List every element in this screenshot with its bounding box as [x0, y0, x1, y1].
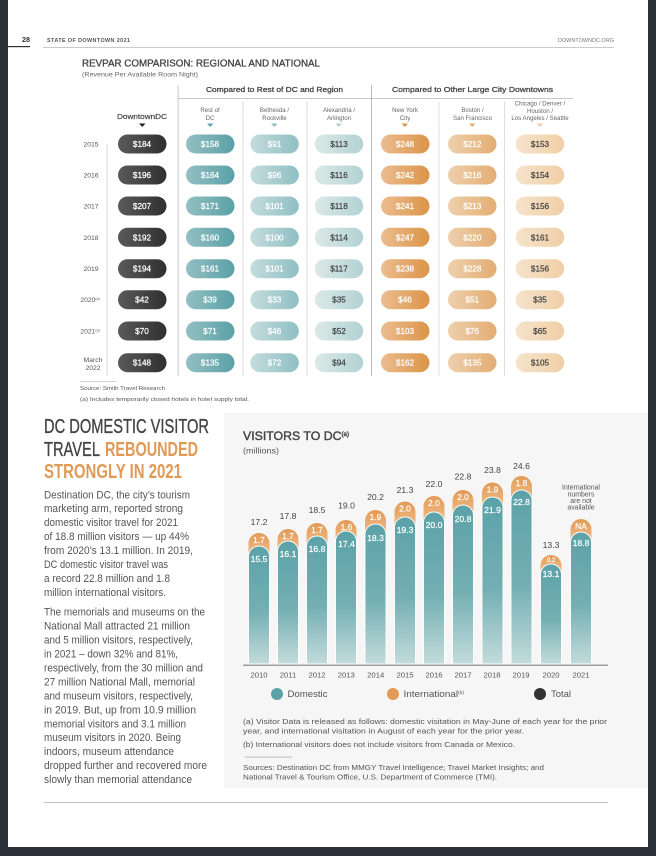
text block: domestic visitor paragraph: domestic visitor travel for 2021	[44, 517, 178, 529]
total labels: 23.8	[484, 465, 501, 475]
x axis years: 2020	[542, 670, 560, 680]
column: Boston / San Francisco: $212	[463, 140, 482, 149]
column: Alexandria / Arlington: $117	[330, 265, 348, 274]
international labels: 1.9	[370, 512, 382, 522]
domestic labels: 19.3	[397, 525, 414, 535]
international labels: 1.8	[516, 478, 528, 488]
column: Chicago / Denver / Houston / Los Angeles / Seattle: $65	[533, 327, 547, 336]
column headers: Alexandria /	[323, 107, 355, 114]
row labels: years	[80, 142, 103, 372]
column: Rest of DC: $161	[201, 265, 220, 274]
x axis years: 2017	[454, 670, 472, 680]
column: DowntownDC: $192	[133, 233, 152, 242]
column headers: San Francisco	[453, 115, 493, 122]
total labels	[251, 461, 560, 550]
page header: STATE OF DOWNTOWN 2021	[47, 38, 130, 44]
text block: domestic visitor paragraph: Destination DC, the city’s tourism	[44, 489, 190, 501]
text block: National Mall paragraph: slowly than memorial attendance	[44, 774, 192, 786]
total labels: 21.3	[397, 485, 414, 495]
text block: National Mall paragraph: in 2019. But, up from 10.9 million	[44, 704, 196, 716]
chart footnotes	[243, 717, 608, 781]
text block: National Mall paragraph: 27 million National Mall, memorial	[44, 677, 195, 689]
table title: REVPAR COMPARISON: REGIONAL AND NATIONAL	[82, 58, 320, 70]
column: Chicago / Denver / Houston / Los Angeles / Seattle: $161	[531, 233, 550, 242]
column: Alexandria / Arlington: $116	[330, 171, 348, 180]
column: Boston / San Francisco: $220	[463, 233, 482, 242]
domestic labels: 15.5	[251, 554, 268, 564]
column: New York City: $247	[396, 233, 415, 242]
international labels	[253, 478, 587, 564]
total labels: 18.5	[309, 505, 326, 515]
column: Alexandria / Arlington: $35	[332, 296, 346, 305]
row labels: years: 2018	[83, 235, 99, 242]
table subtitle: (Revenue Per Available Room Night)	[82, 72, 198, 78]
legend: (b)	[458, 690, 464, 695]
text block: National Mall paragraph: dropped further and recovered more	[44, 760, 207, 772]
total labels: 22.0	[426, 479, 443, 489]
column: DowntownDC	[118, 134, 166, 372]
column: DowntownDC: $196	[133, 171, 152, 180]
legend: Domestic	[288, 688, 328, 699]
column headers: New York	[392, 107, 419, 114]
panel: RevPAR comparison table	[80, 58, 573, 403]
domestic labels: 13.1	[543, 569, 560, 579]
column: Chicago / Denver / Houston / Los Angeles / Seattle: $105	[531, 359, 550, 368]
heading: DC domestic visitor travel: REBOUNDED	[105, 438, 198, 461]
column: Alexandria / Arlington: $118	[330, 202, 348, 211]
column headers: DowntownDC	[117, 112, 168, 121]
international labels: NA	[575, 521, 587, 531]
text block: domestic visitor paragraph: of 18.8 million visitors — up 44%	[44, 531, 189, 543]
column: Rest of DC	[186, 134, 234, 372]
legend	[271, 688, 571, 700]
international labels: 0.2	[547, 558, 556, 564]
row labels: years: March	[84, 357, 103, 364]
callout: international not available: available	[567, 505, 595, 512]
text block: National Mall paragraph: respectively, from the 30 million and	[44, 663, 203, 675]
total labels: 20.2	[367, 492, 384, 502]
chart title: VISITORS TO DC	[243, 429, 339, 443]
text block: domestic visitor paragraph: DC domestic visitor travel was	[44, 559, 168, 571]
column: New York City: $103	[396, 327, 415, 336]
column: DowntownDC: $207	[133, 202, 152, 211]
column: Bethesda / Rockville: $72	[268, 359, 282, 368]
column: Chicago / Denver / Houston / Los Angeles / Seattle: $153	[531, 140, 550, 149]
chart footnotes: year, and international visitation in August of each year for the prior year.	[243, 727, 524, 736]
column: Chicago / Denver / Houston / Los Angeles / Seattle	[516, 134, 564, 372]
row labels: years: 2015	[83, 142, 99, 148]
international labels: 1.6	[341, 522, 353, 532]
total labels: 19.0	[338, 500, 355, 510]
domestic labels: 20.8	[455, 514, 472, 524]
column: DowntownDC: $42	[135, 296, 149, 305]
text block: domestic visitor paragraph: million international visitors.	[44, 587, 166, 599]
column headers: Arlington	[327, 115, 351, 122]
column headers	[117, 100, 569, 127]
table source notes: (a) Includes temporarily closed hotels in hotel supply total.	[80, 397, 249, 403]
panel: visitors to DC	[224, 413, 648, 788]
table source notes	[80, 381, 249, 403]
column: DowntownDC: $70	[135, 327, 149, 336]
column: Bethesda / Rockville: $46	[268, 327, 282, 336]
total labels: 22.8	[455, 472, 472, 482]
text block: National Mall paragraph: National Mall attracted 21 million	[44, 620, 190, 632]
column: Bethesda / Rockville: $101	[265, 202, 284, 211]
page header: DOWNTOWNDC.ORG	[558, 38, 614, 44]
chart footnotes: (a) Visitor Data is released as follows: domestic visitation in May-June of each year for the prior	[243, 717, 608, 726]
column: Rest of DC: $160	[201, 233, 220, 242]
column: Rest of DC: $164	[201, 171, 220, 180]
column: Chicago / Denver / Houston / Los Angeles / Seattle: $156	[531, 265, 550, 274]
total labels: 17.2	[251, 517, 268, 527]
international labels: 1.9	[487, 484, 499, 494]
column: Rest of DC: $39	[203, 296, 217, 305]
x axis years: 2012	[308, 670, 326, 680]
column: New York City: $238	[396, 265, 415, 274]
text block: domestic visitor paragraph	[44, 489, 193, 599]
column: Boston / San Francisco: $213	[463, 202, 482, 211]
chart footnotes: Sources: Destination DC from MMGY Travel Intelligence; Travel Market Insights; and	[243, 763, 544, 772]
x axis years: 2014	[367, 670, 385, 680]
text block: domestic visitor paragraph: from 2020’s 13.1 million. In 2019,	[44, 545, 193, 557]
chart footnotes: National Travel & Tourism Office, U.S. Department of Commerce (TMI).	[243, 772, 497, 781]
column headers: Rest of	[200, 107, 220, 114]
legend: International	[404, 688, 455, 699]
text block: domestic visitor paragraph: a record 22.8 million and 1.8	[44, 573, 170, 585]
international labels: 1.7	[311, 525, 323, 535]
column: New York City: $248	[396, 140, 415, 149]
column headers: Rockville	[262, 115, 287, 122]
callout: international not available: International	[562, 484, 600, 492]
column: Rest of DC: $171	[201, 202, 220, 211]
column headers: City	[400, 115, 411, 122]
column: Rest of DC: $71	[203, 327, 217, 336]
column: DowntownDC: $184	[133, 140, 152, 149]
row labels: years: (a)	[95, 328, 100, 332]
legend: Total	[551, 688, 571, 699]
column: Boston / San Francisco: $228	[463, 265, 482, 274]
x axis years: 2015	[396, 670, 414, 680]
heading: DC domestic visitor travel: TRAVEL	[44, 438, 100, 461]
domestic labels: 18.8	[573, 538, 590, 548]
international labels: 2.0	[399, 504, 411, 514]
international labels: 2.0	[428, 498, 440, 508]
text block: National Mall paragraph: memorial visitors and 3.1 million	[44, 718, 186, 730]
x axis years: 2019	[512, 670, 530, 680]
domestic bars	[248, 490, 592, 664]
column: Alexandria / Arlington: $94	[332, 359, 346, 368]
x axis years: 2013	[338, 670, 355, 680]
row labels: years: (a)	[95, 297, 100, 301]
page header: 28	[22, 37, 30, 44]
column: New York City: $46	[398, 296, 412, 305]
text block: National Mall paragraph: in 2021 – down 32% and 81%,	[44, 649, 178, 661]
x axis years: 2021	[572, 670, 590, 680]
column: Bethesda / Rockville: $33	[268, 296, 282, 305]
column: New York City: $162	[396, 359, 415, 368]
domestic labels: 17.4	[338, 539, 355, 549]
column: Boston / San Francisco: $216	[463, 171, 482, 180]
page header	[8, 37, 614, 48]
table source notes: Source: Smith Travel Research	[80, 386, 165, 392]
x axis years: 2016	[425, 670, 443, 680]
text block: National Mall paragraph	[44, 607, 207, 786]
heading: DC domestic visitor travel	[44, 415, 209, 483]
row labels: years: 2019	[83, 266, 99, 273]
column: Boston / San Francisco	[448, 134, 496, 372]
domestic labels: 20.0	[426, 520, 443, 530]
chart unit: (millions)	[243, 446, 279, 456]
column: New York City: $241	[396, 202, 415, 211]
column: Chicago / Denver / Houston / Los Angeles / Seattle: $154	[531, 171, 550, 180]
total labels: 13.3	[543, 540, 560, 550]
x axis years: 2018	[483, 670, 501, 680]
callout: international not available: numbers	[568, 491, 595, 498]
international labels: 1.7	[253, 535, 265, 545]
domestic labels: 16.1	[280, 549, 297, 559]
text block: National Mall paragraph: and museum visitors, respectively,	[44, 690, 193, 702]
chart title: (a)	[341, 432, 349, 438]
column: Bethesda / Rockville: $101	[265, 265, 284, 274]
heading: DC domestic visitor travel: DC DOMESTIC VISITOR	[44, 415, 209, 438]
column: Alexandria / Arlington	[315, 134, 363, 372]
heading: DC domestic visitor travel: STRONGLY IN 2021	[44, 460, 182, 483]
column: Rest of DC: $135	[201, 359, 220, 368]
text block: National Mall paragraph: The memorials and museums on the	[44, 607, 205, 619]
group heading: regional: Compared to Rest of DC and Region	[206, 85, 343, 94]
x axis years	[250, 670, 590, 680]
callout: international not available: are not	[570, 498, 592, 505]
column headers: Boston /	[461, 107, 484, 114]
column: Bethesda / Rockville: $96	[268, 171, 282, 180]
column: Alexandria / Arlington: $114	[330, 233, 348, 242]
text block: domestic visitor paragraph: marketing arm, reported strong	[44, 503, 183, 515]
row labels: years: 2020	[80, 297, 95, 304]
callout: international not available	[562, 484, 600, 512]
column: Bethesda / Rockville	[250, 134, 299, 372]
column headers: Houston /	[527, 108, 553, 115]
text block: National Mall paragraph: museum visitors in 2020. Being	[44, 732, 181, 744]
international labels: 2.0	[457, 492, 469, 502]
column: Rest of DC: $158	[201, 140, 220, 149]
domestic labels: 18.3	[367, 533, 384, 543]
column: Alexandria / Arlington: $113	[330, 140, 348, 149]
column: New York City	[381, 134, 430, 372]
text block: National Mall paragraph: and 5 million visitors, respectively,	[44, 634, 193, 646]
x axis years: 2011	[280, 670, 296, 680]
x axis years: 2010	[250, 670, 268, 680]
bar chart: visitors 2010-2021	[243, 461, 608, 680]
column: Boston / San Francisco: $51	[465, 296, 480, 305]
row labels: years: 2022	[85, 365, 101, 372]
column: Boston / San Francisco: $135	[463, 359, 482, 368]
column headers: DC	[206, 115, 215, 122]
column headers: Bethesda /	[260, 107, 289, 114]
column: Alexandria / Arlington: $52	[332, 327, 346, 336]
domestic labels: 22.8	[513, 497, 530, 507]
domestic labels: 21.9	[484, 505, 501, 515]
international labels: 1.7	[282, 531, 294, 541]
column headers: Los Angeles / Seattle	[511, 115, 569, 122]
international caps	[248, 476, 592, 573]
row labels: years: 2021	[80, 328, 95, 336]
row labels: years: 2016	[83, 172, 99, 180]
column: New York City: $242	[396, 171, 415, 180]
column: Chicago / Denver / Houston / Los Angeles / Seattle: $156	[531, 202, 550, 211]
total labels: 24.6	[513, 461, 530, 471]
column: Bethesda / Rockville: $91	[268, 140, 282, 149]
column: Chicago / Denver / Houston / Los Angeles / Seattle: $35	[533, 296, 547, 305]
group heading: national: Compared to Other Large City Downtowns	[392, 85, 553, 94]
domestic labels: 16.8	[309, 544, 326, 554]
total labels: 17.8	[280, 511, 297, 521]
row labels: years: 2017	[83, 204, 99, 210]
text block: National Mall paragraph: indoors, museum attendance	[44, 746, 174, 758]
column: DowntownDC: $194	[133, 265, 152, 274]
column headers: Chicago / Denver /	[515, 100, 566, 108]
chart footnotes: (b) International visitors does not include visitors from Canada or Mexico.	[243, 740, 515, 749]
column: DowntownDC: $148	[133, 359, 152, 368]
domestic labels	[251, 497, 590, 579]
column: Bethesda / Rockville: $100	[265, 233, 284, 242]
column: Boston / San Francisco: $76	[465, 327, 480, 336]
